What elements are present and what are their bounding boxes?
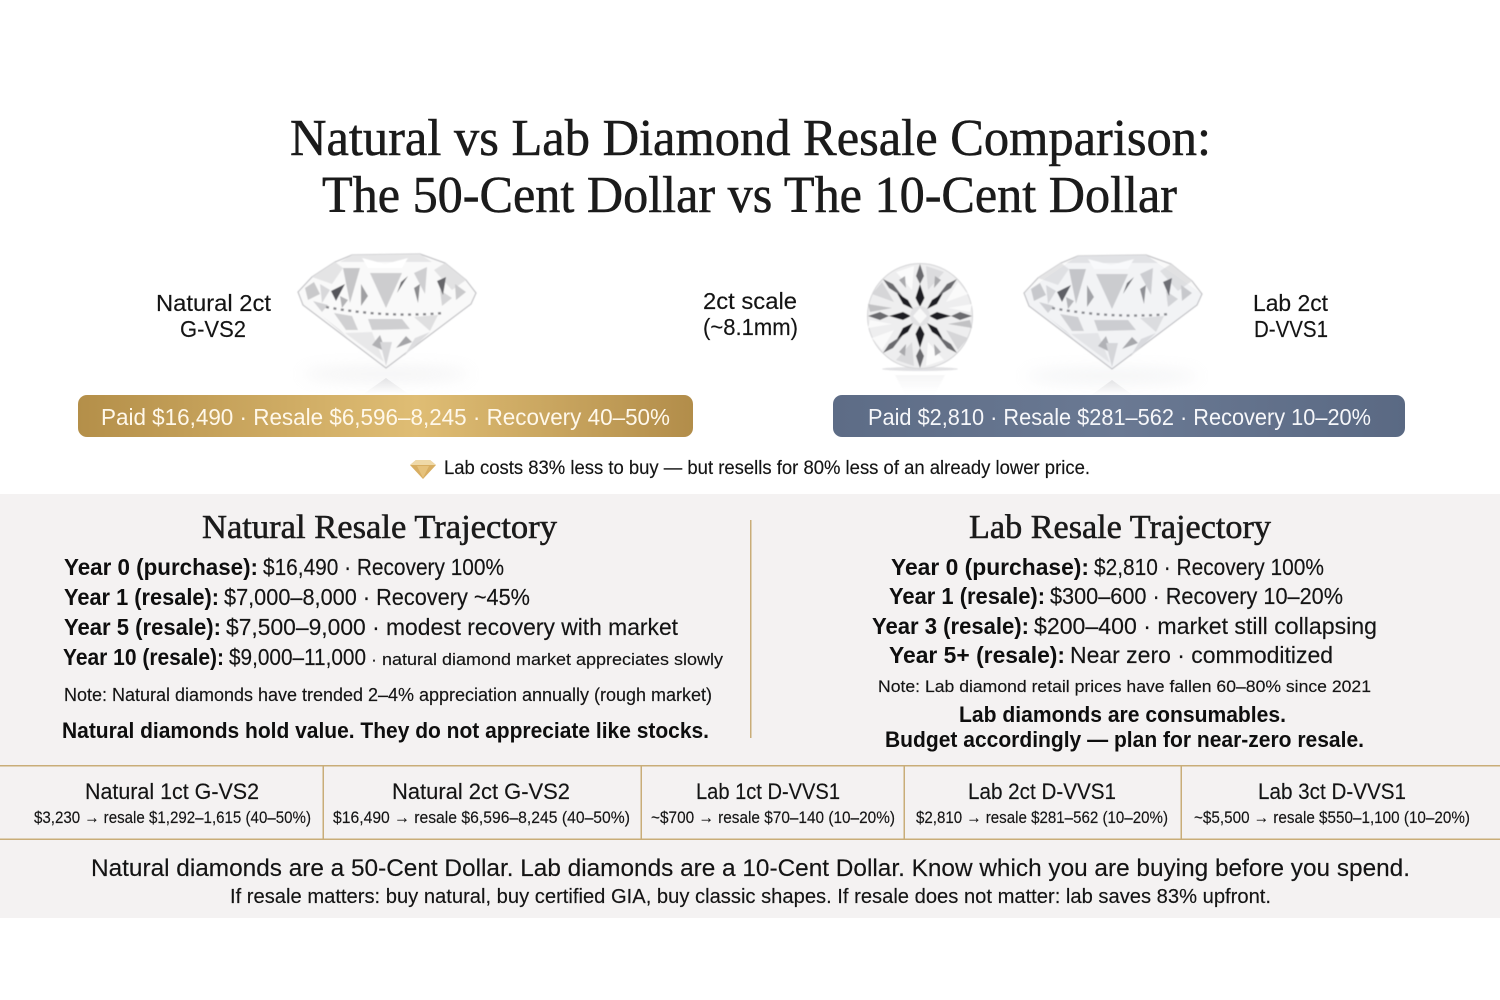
lab trajectory rows: Year 3 (resale):: [872, 613, 1029, 639]
icon: natural diamond side view: [298, 254, 476, 395]
lab trajectory rows: [872, 554, 1377, 668]
table cell: lab 3ct: Lab 3ct D-VVS1: [1258, 779, 1406, 804]
lab takeaway: [885, 702, 1364, 752]
table cell: lab 2ct: [916, 779, 1168, 827]
natural trajectory rows: Year 10 (resale):: [63, 644, 224, 670]
icon: round diamond top view: [868, 264, 972, 394]
title: Natural vs Lab Diamond Resale Comparison:: [290, 110, 1211, 167]
natural trajectory rows: Year 0 (purchase):: [64, 554, 258, 580]
natural price bar: [78, 395, 693, 437]
table cell: natural 2ct: [333, 779, 630, 827]
natural trajectory rows: [63, 554, 724, 670]
label: 2ct scale: 2ct scale: [703, 288, 797, 314]
table cell: lab 3ct: [1194, 779, 1470, 827]
label: lab diamond spec: [1253, 290, 1329, 342]
lab trajectory rows: Near zero · commoditized: [1070, 642, 1333, 668]
label: natural diamond spec: G-VS2: [180, 316, 246, 342]
natural price bar: Paid $16,490 · Resale $6,596–8,245 · Recovery 40–50%: [101, 404, 670, 430]
lab trajectory rows: $2,810 · Recovery 100%: [1094, 554, 1324, 580]
footer conclusion: [91, 855, 1410, 908]
lab takeaway: Budget accordingly — plan for near-zero resale.: [885, 727, 1364, 752]
title: The 50-Cent Dollar vs The 10-Cent Dollar: [322, 167, 1177, 224]
natural note: Note: Natural diamonds have trended 2–4% appreciation annually (rough market): [64, 685, 712, 705]
table cell: lab 1ct: [651, 779, 895, 827]
label: 2ct scale: [703, 288, 798, 340]
natural trajectory rows: Year 1 (resale):: [64, 584, 219, 610]
natural takeaway: Natural diamonds hold value. They do not appreciate like stocks.: [62, 718, 709, 743]
footer conclusion: If resale matters: buy natural, buy certified GIA, buy classic shapes. If resale does not matter: lab saves 83% upfront.: [230, 886, 1271, 908]
background panel: trajectory and summary area: [0, 494, 1500, 918]
heading: natural trajectory: Natural Resale Trajectory: [202, 509, 557, 546]
lab price bar: Paid $2,810 · Resale $281–562 · Recovery 10–20%: [868, 404, 1371, 430]
title: [290, 110, 1211, 224]
lab trajectory rows: Year 1 (resale):: [889, 583, 1045, 609]
natural trajectory rows: · natural diamond market appreciates slowly: [371, 650, 724, 669]
natural trajectory rows: $16,490 · Recovery 100%: [263, 554, 504, 580]
lab note: Note: Lab diamond retail prices have fallen 60–80% since 2021: [878, 677, 1371, 696]
table cell: lab 1ct: ~$700 → resale $70–140 (10–20%): [651, 808, 895, 827]
lab trajectory rows: Year 5+ (resale):: [889, 642, 1065, 668]
table cell: natural 2ct: $16,490 → resale $6,596–8,245 (40–50%): [333, 808, 630, 827]
table cell: lab 3ct: ~$5,500 → resale $550–1,100 (10–20%): [1194, 808, 1470, 827]
table cell: natural 2ct: Natural 2ct G-VS2: [392, 779, 570, 804]
lab trajectory rows: Year 0 (purchase):: [891, 554, 1089, 580]
table cell: natural 1ct: Natural 1ct G-VS2: [85, 779, 259, 804]
icon: gold gem: [410, 460, 436, 479]
icon: lab diamond side view: [1024, 255, 1202, 396]
label: natural diamond spec: Natural 2ct: [156, 290, 272, 316]
heading: lab trajectory: Lab Resale Trajectory: [969, 509, 1271, 546]
natural trajectory rows: $7,000–8,000 · Recovery ~45%: [224, 584, 530, 610]
lab takeaway: Lab diamonds are consumables.: [959, 702, 1286, 727]
label: 2ct scale: (~8.1mm): [703, 314, 798, 340]
panel: lab resale trajectory: [872, 509, 1377, 752]
natural trajectory rows: $7,500–9,000 · modest recovery with market: [226, 614, 679, 640]
label: natural diamond spec: [156, 290, 272, 342]
footer conclusion: Natural diamonds are a 50-Cent Dollar. Lab diamonds are a 10-Cent Dollar. Know which you are buying before you spend.: [91, 855, 1410, 882]
summary table: [0, 765, 1500, 840]
table cell: lab 2ct: $2,810 → resale $281–562 (10–20%): [916, 808, 1168, 827]
table cell: lab 1ct: Lab 1ct D-VVS1: [696, 779, 840, 804]
natural trajectory rows: $9,000–11,000: [229, 644, 366, 670]
label: lab diamond spec: Lab 2ct: [1253, 290, 1329, 316]
label: lab diamond spec: D-VVS1: [1254, 316, 1328, 342]
comparison note: Lab costs 83% less to buy — but resells for 80% less of an already lower price.: [444, 458, 1090, 479]
table cell: natural 1ct: [34, 779, 311, 827]
table cell: natural 1ct: $3,230 → resale $1,292–1,615 (40–50%): [34, 808, 311, 827]
natural trajectory rows: Year 5 (resale):: [64, 614, 221, 640]
lab trajectory rows: $200–400 · market still collapsing: [1034, 613, 1377, 639]
panel: natural resale trajectory: [62, 509, 724, 743]
lab price bar: [833, 395, 1405, 437]
lab trajectory rows: $300–600 · Recovery 10–20%: [1050, 583, 1343, 609]
table cell: lab 2ct: Lab 2ct D-VVS1: [968, 779, 1116, 804]
